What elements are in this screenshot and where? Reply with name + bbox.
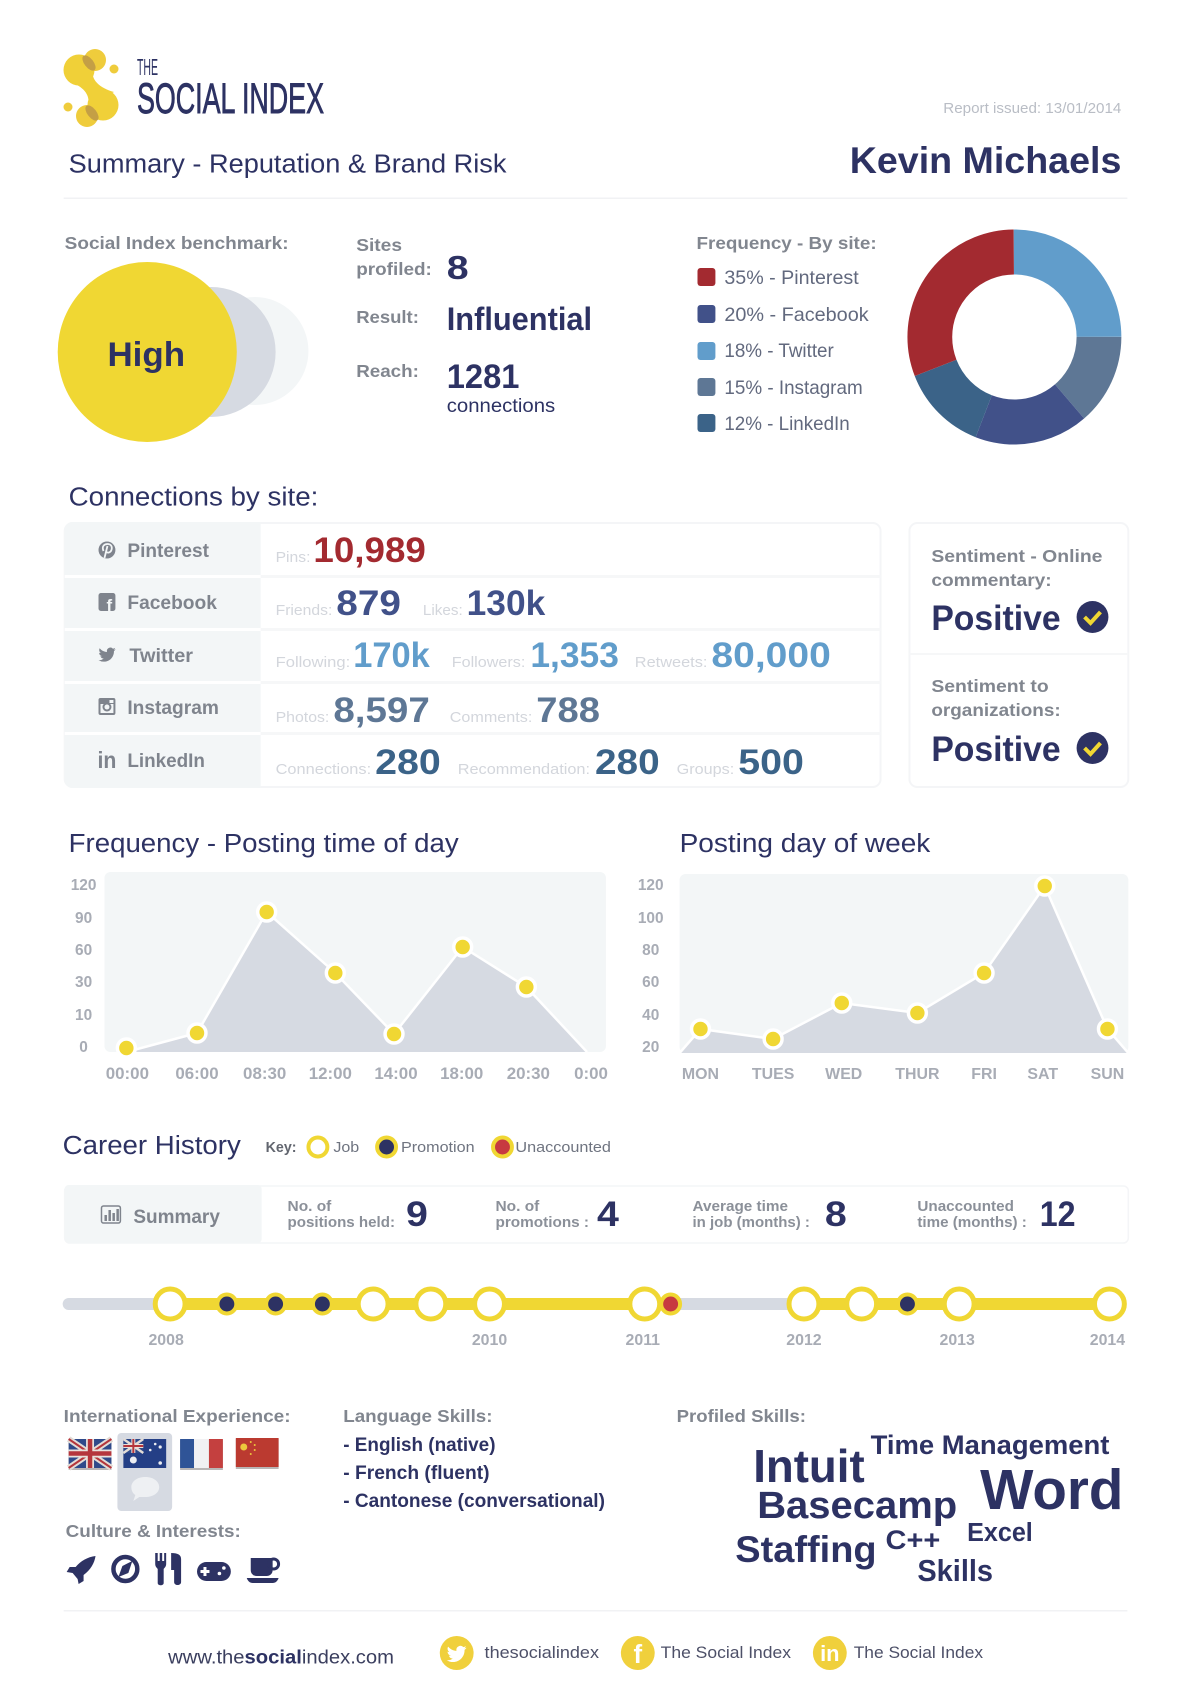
positions stat: positions held: [288, 1214, 395, 1231]
photos metric [276, 691, 430, 730]
summary title: Summary - Reputation & Brand Risk [69, 150, 506, 179]
word cloud: Staffing [735, 1529, 877, 1570]
unaccounted stat: time (months) : [917, 1214, 1027, 1231]
panel: career summary [65, 1185, 1128, 1243]
unaccounted stat: Unaccounted [917, 1198, 1014, 1215]
legend: 12% - LinkedIn [724, 414, 850, 435]
flag: UK [69, 1439, 111, 1470]
heading: Profiled Skills: [677, 1406, 806, 1426]
y axis [638, 877, 664, 1056]
y axis: 40 [642, 1007, 659, 1024]
average time stat: Average time [693, 1198, 788, 1215]
facebook page: The Social Index [661, 1643, 792, 1662]
photos metric: Photos: [276, 709, 329, 726]
y axis: 120 [71, 877, 96, 894]
flag: Australia [123, 1439, 166, 1468]
retweets metric: Retweets: [635, 654, 707, 671]
logo: THE [137, 54, 158, 80]
unaccounted marker [661, 1294, 680, 1314]
panel: international experience [64, 1406, 291, 1511]
x axis: MON [682, 1066, 719, 1083]
connections metric [276, 743, 441, 782]
icon: compass [113, 1557, 137, 1581]
recommendation metric: 280 [595, 743, 660, 782]
icon: pinterest [99, 542, 115, 558]
x axis: 18:00 [440, 1064, 483, 1083]
flag: France [180, 1439, 223, 1470]
donut chart [930, 252, 1099, 422]
row: LinkedIn [98, 743, 804, 782]
y axis: 60 [75, 942, 92, 959]
language list: - French (fluent) [343, 1463, 490, 1484]
job markers [155, 1289, 1124, 1319]
sentiment organizations [931, 676, 1108, 769]
label: LinkedIn [127, 751, 205, 772]
y axis: 30 [75, 974, 92, 991]
sentiment online: commentary: [931, 570, 1052, 590]
legend: 20% - Facebook [724, 305, 869, 326]
chart: posting day of week [638, 874, 1128, 1083]
logo wordmark large: SOCIAL INDEX [137, 75, 324, 123]
unaccounted stat: 12 [1040, 1195, 1076, 1234]
sentiment online [931, 546, 1108, 638]
y axis: 100 [638, 910, 664, 927]
language list: - English (native) [343, 1435, 496, 1456]
promotions stat [496, 1195, 620, 1234]
panel: connections table [65, 522, 881, 788]
promotions stat: No. of [496, 1198, 540, 1215]
label: Summary [133, 1207, 220, 1228]
unaccounted stat [917, 1195, 1076, 1234]
x axis: THUR [895, 1066, 940, 1083]
facebook page [621, 1636, 792, 1670]
legend: 35% - Pinterest [724, 268, 859, 289]
logo [64, 49, 324, 127]
sentiment organizations: Sentiment to [931, 676, 1049, 696]
following metric [276, 636, 430, 675]
word cloud: C++ [886, 1525, 940, 1555]
comments metric: Comments: [450, 709, 532, 726]
comments metric [450, 691, 600, 730]
promotions stat: 4 [597, 1195, 620, 1234]
positions stat [288, 1195, 428, 1234]
result label: Result: [356, 307, 419, 327]
icon: instagram [99, 698, 115, 715]
icon: check [1077, 732, 1108, 764]
linkedin page [813, 1636, 984, 1670]
icon: facebook [99, 593, 115, 615]
panel: key stats [356, 235, 592, 417]
icon: fork and knife [155, 1553, 181, 1585]
x axis: 20:30 [507, 1064, 550, 1083]
icon: rocket [67, 1556, 96, 1584]
header [69, 101, 1121, 181]
sites label: Sites [356, 235, 402, 255]
y axis: 0 [79, 1039, 88, 1056]
logo mark [64, 49, 118, 127]
x axis: 08:30 [243, 1064, 286, 1083]
year labels: 2012 [786, 1332, 822, 1349]
reach unit: connections [447, 396, 555, 417]
panel: benchmark [58, 233, 308, 442]
x axis: 00:00 [106, 1064, 149, 1083]
panel: sentiment [909, 523, 1128, 787]
line [126, 912, 587, 1052]
legend [697, 268, 869, 435]
legend: 18% - Twitter [724, 341, 834, 362]
day of week heading: Posting day of week [680, 830, 930, 858]
legend: 15% - Instagram [724, 378, 863, 399]
career key: Key: [266, 1139, 297, 1156]
icon: facebook: f [106, 596, 112, 615]
year labels [148, 1332, 1125, 1349]
twitter handle [440, 1636, 600, 1670]
heading: Language Skills: [343, 1406, 493, 1426]
likes metric: 130k [467, 584, 546, 623]
row: Twitter [99, 636, 831, 675]
panel: profiled skills [677, 1406, 1123, 1588]
word cloud: Time Management [871, 1430, 1109, 1460]
y axis: 20 [642, 1039, 659, 1056]
year labels: 2013 [939, 1332, 975, 1349]
data points [117, 903, 535, 1057]
word cloud: Word [980, 1459, 1123, 1522]
x axis: 0:00 [574, 1064, 608, 1083]
y axis: 80 [642, 942, 659, 959]
recommendation metric [458, 743, 660, 782]
sentiment organizations: organizations: [931, 700, 1061, 720]
icon: linkedin: in [98, 747, 116, 773]
benchmark circles [58, 262, 308, 442]
linkedin page: The Social Index [854, 1643, 984, 1662]
x axis: 06:00 [175, 1064, 219, 1083]
panel: culture and interests [66, 1521, 279, 1585]
language list [343, 1435, 605, 1512]
career key [266, 1138, 611, 1156]
pins metric: Pins: [276, 549, 310, 566]
groups metric [677, 743, 804, 782]
career key: Job [333, 1139, 359, 1156]
row: Facebook [99, 584, 546, 623]
sentiment online: Positive [931, 599, 1061, 638]
word cloud: Basecamp [757, 1485, 957, 1527]
reach label: Reach: [356, 361, 419, 381]
label: Pinterest [127, 541, 210, 562]
website: www.the socialindex.com [167, 1647, 394, 1669]
likes metric [423, 584, 546, 623]
language list: - Cantonese (conversational) [343, 1491, 605, 1512]
retweets metric [635, 636, 831, 675]
followers metric: 1,353 [530, 636, 619, 675]
time of day heading: Frequency - Posting time of day [69, 830, 459, 858]
sites label: profiled: [356, 259, 432, 279]
chart: posting time of day [71, 872, 608, 1083]
career history heading: Career History [63, 1132, 241, 1160]
panel: frequency by site [696, 233, 1099, 435]
word cloud: Skills [917, 1553, 993, 1588]
result value: Influential [447, 301, 592, 337]
heading: Culture & Interests: [66, 1521, 241, 1541]
x axis: SUN [1091, 1066, 1124, 1083]
pins metric: 10,989 [313, 531, 426, 570]
reach value: 1281 [447, 358, 519, 396]
sentiment organizations: Positive [931, 730, 1061, 769]
y axis: 90 [75, 910, 92, 927]
panel: language skills [343, 1406, 605, 1512]
groups metric: Groups: [677, 761, 734, 778]
frequency heading: Frequency - By site: [696, 233, 877, 253]
twitter handle: thesocialindex [485, 1643, 600, 1662]
report date: Report issued: 13/01/2014 [943, 101, 1121, 117]
following metric: 170k [353, 636, 430, 675]
word cloud: Intuit [753, 1440, 865, 1492]
area [680, 886, 1128, 1053]
label: Instagram [127, 698, 219, 719]
x axis: TUES [752, 1066, 795, 1083]
label: Facebook [127, 593, 217, 614]
person name: Kevin Michaels [850, 140, 1121, 181]
year labels: 2008 [148, 1332, 184, 1349]
followers metric [452, 636, 619, 675]
word cloud [735, 1430, 1123, 1588]
area [126, 912, 587, 1052]
year labels: 2011 [626, 1332, 660, 1349]
year labels: 2010 [472, 1332, 507, 1349]
x axis: FRI [971, 1066, 997, 1083]
positions stat: No. of [288, 1198, 332, 1215]
friends metric: Friends: [276, 602, 332, 619]
icon: bar chart [101, 1206, 120, 1223]
year labels: 2014 [1090, 1332, 1125, 1349]
career key: Promotion [401, 1139, 475, 1156]
highlight behind Australia [117, 1433, 172, 1511]
sites value: 8 [447, 249, 469, 286]
y axis [71, 877, 96, 1056]
facebook page: f [633, 1641, 642, 1669]
speech bubble [131, 1477, 159, 1501]
line [680, 886, 1128, 1053]
average time stat [693, 1195, 847, 1234]
x axis [682, 1066, 1124, 1083]
career timeline [63, 1289, 1125, 1349]
benchmark value: High [107, 336, 185, 374]
likes metric: Likes: [423, 602, 463, 619]
friends metric [276, 584, 401, 623]
comments metric: 788 [536, 691, 600, 730]
x axis: SAT [1027, 1066, 1058, 1083]
data points [692, 877, 1116, 1048]
recommendation metric: Recommendation: [458, 761, 590, 778]
friends metric: 879 [336, 584, 401, 623]
promotion markers [217, 1294, 917, 1314]
average time stat: in job (months) : [693, 1214, 810, 1231]
groups metric: 500 [738, 743, 804, 782]
y axis: 60 [642, 974, 659, 991]
icon: coffee cup [247, 1558, 279, 1583]
row: Pinterest [99, 531, 426, 570]
footer [167, 1636, 984, 1670]
icon: twitter [99, 648, 116, 662]
heading: International Experience: [64, 1406, 291, 1426]
average time stat: 8 [825, 1195, 847, 1234]
x axis: WED [825, 1066, 862, 1083]
retweets metric: 80,000 [711, 636, 831, 675]
y axis: 10 [75, 1007, 92, 1024]
x axis: 14:00 [374, 1064, 418, 1083]
icon: gamepad [197, 1562, 231, 1581]
linkedin page: in [820, 1641, 840, 1666]
word cloud: Excel [967, 1519, 1033, 1547]
career key: Unaccounted [515, 1139, 611, 1156]
x axis [106, 1064, 608, 1083]
row: Instagram [99, 691, 600, 730]
connections heading: Connections by site: [69, 483, 318, 512]
photos metric: 8,597 [333, 691, 430, 730]
followers metric: Followers: [452, 654, 525, 671]
promotions stat: promotions : [496, 1214, 589, 1231]
x axis: 12:00 [309, 1064, 352, 1083]
following metric: Following: [276, 654, 350, 671]
y axis: 120 [638, 877, 664, 894]
sentiment online: Sentiment - Online [931, 546, 1102, 566]
icon: check [1077, 601, 1108, 633]
label: Twitter [129, 646, 194, 667]
benchmark heading: Social Index benchmark: [65, 233, 289, 253]
connections metric: 280 [375, 743, 441, 782]
positions stat: 9 [406, 1195, 428, 1234]
flag: China [236, 1438, 279, 1469]
connections metric: Connections: [276, 761, 371, 778]
